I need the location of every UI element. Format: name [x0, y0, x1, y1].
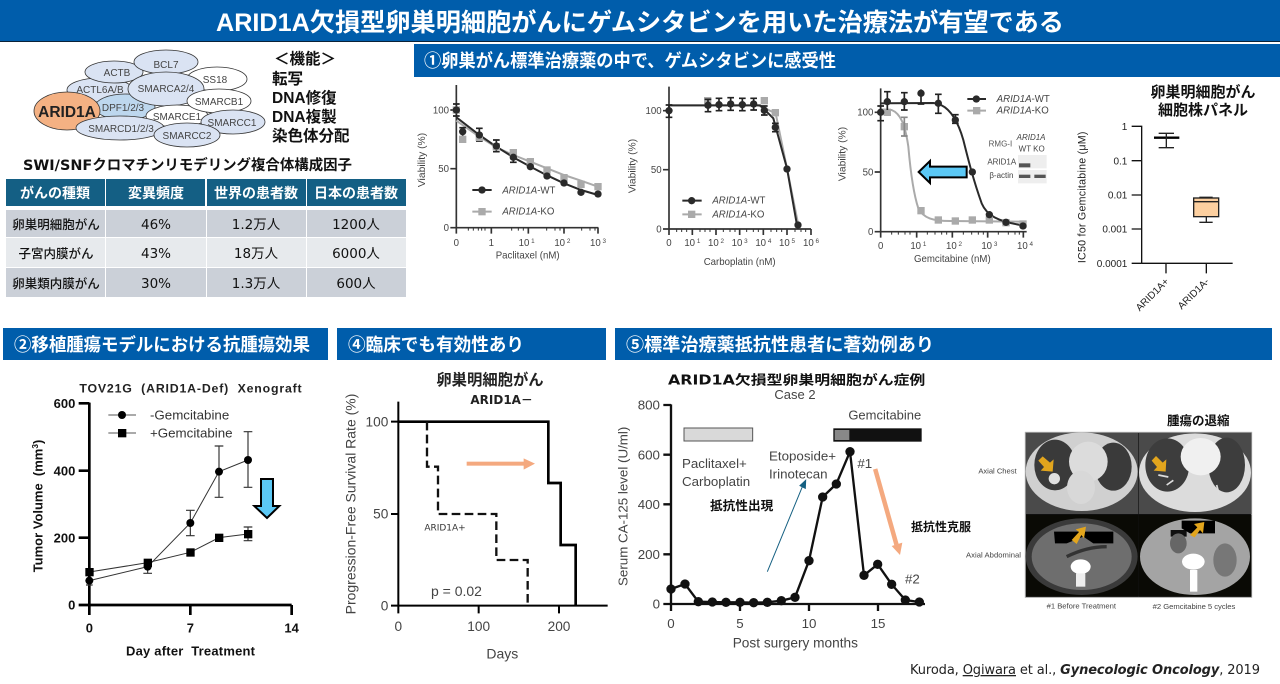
diagram: SWI/SNF complex: BCL7	[153, 60, 179, 71]
chart: paclitaxel viability: 0	[444, 223, 449, 234]
chart: CA-125 case: Serum CA-125 level (U/ml)	[615, 427, 630, 586]
chart: progression-free survival: 0	[381, 598, 389, 613]
chart: gemcitabine viability: 3	[992, 241, 998, 248]
chart: xenograft tumor volume: 600	[54, 396, 75, 411]
chart: carboplatin viability: 100	[646, 106, 662, 117]
heading: cell line panel	[1150, 83, 1256, 119]
table: mutation frequency: 46%	[141, 217, 171, 233]
chart: xenograft tumor volume: Tumor Volume (mm	[30, 449, 45, 572]
table: mutation frequency	[6, 179, 406, 297]
diagram: SWI/SNF complex: ARID1A	[38, 104, 96, 121]
chart: xenograft tumor volume: 0	[68, 598, 75, 613]
section header 5	[615, 328, 1272, 360]
chart: CA-125 case: Case 2	[774, 387, 816, 402]
arrow: left shift	[919, 161, 967, 183]
table: mutation frequency: 1.2万人	[232, 217, 281, 233]
chart: CA-125 case: 5	[736, 616, 744, 631]
chart: paclitaxel viability: Paclitaxel (nM)	[496, 251, 560, 262]
chart: paclitaxel viability: 10	[519, 238, 529, 249]
functions list: DNA複製	[272, 108, 337, 126]
western blot inset: ARID1A	[987, 158, 1017, 167]
diagram: SWI/SNF complex: SMARCB1	[195, 97, 244, 108]
chart: xenograft tumor volume: 14	[284, 620, 300, 635]
chart: progression-free survival: Days	[486, 646, 518, 662]
section header 4: ④臨床でも有効性あり	[348, 335, 524, 355]
table: mutation frequency: がんの種類	[20, 185, 90, 201]
chart: carboplatin viability: ARID1A-WT	[711, 196, 766, 207]
chart: IC50 box plot: ARID1A+	[1134, 276, 1172, 314]
chart: CA-125 case: 800	[638, 398, 660, 413]
chart: gemcitabine viability: 2	[957, 241, 962, 248]
chart: xenograft tumor volume: 400	[54, 463, 75, 478]
chart: CA-125 case: Etoposide+	[769, 448, 836, 463]
table: mutation frequency: 6000人	[332, 246, 380, 262]
chart: paclitaxel viability: ARID1A-WT	[501, 185, 556, 196]
label: resistance overcome: 抵抗性克服	[911, 519, 971, 534]
chart: carboplatin viability: Carboplatin (nM)	[704, 257, 776, 268]
chart: CA-125 case	[615, 371, 925, 650]
chart: carboplatin viability: 6	[814, 238, 819, 245]
chart: CA-125 case: 抵抗性出現	[710, 498, 774, 513]
label: tumor shrinkage: 腫瘍の退縮	[1167, 413, 1230, 428]
table: mutation frequency: 600人	[336, 276, 376, 292]
chart: gemcitabine viability: 0	[868, 227, 873, 238]
western blot inset: RMG-I	[989, 140, 1012, 149]
chart: progression-free survival: Progression-Free Survival Rate (%)	[343, 394, 359, 614]
chart: xenograft tumor volume: +Gemcitabine	[150, 426, 233, 441]
chart: xenograft tumor volume: 3	[30, 444, 40, 449]
chart: xenograft tumor volume: )	[30, 440, 45, 444]
heading: SWI/SNF: SWI/SNFクロマチンリモデリング複合体構成因子	[23, 156, 352, 174]
chart: carboplatin viability: 10	[708, 238, 719, 249]
western blot inset	[987, 133, 1047, 183]
chart: progression-free survival: p = 0.02	[431, 583, 482, 599]
table: mutation frequency: 子宮内膜がん	[18, 246, 94, 261]
section header 1	[414, 44, 1280, 77]
chart: gemcitabine viability: 4	[1028, 241, 1033, 248]
CT images panel: Axial Abdominal	[966, 551, 1021, 560]
chart: progression-free survival: 200	[548, 619, 571, 634]
table: mutation frequency: 変異頻度	[128, 185, 184, 201]
western blot inset: β-actin	[989, 171, 1013, 180]
chart: paclitaxel viability: 3	[601, 238, 606, 245]
chart: gemcitabine viability: Viability (%)	[838, 127, 849, 181]
chart: CA-125 case: 400	[638, 497, 660, 512]
table: mutation frequency: 18万人	[234, 246, 279, 262]
diagram: SWI/SNF complex: ACTL6A/B	[76, 85, 124, 96]
CT: chest after	[1139, 433, 1251, 514]
chart: carboplatin viability: Viability (%)	[628, 139, 639, 193]
chart: carboplatin viability: 10	[779, 238, 790, 249]
table: mutation frequency: 日本の患者数	[314, 185, 398, 201]
chart: IC50 box plot: IC50 for Gemcitabine (μM)	[1076, 131, 1088, 263]
table: mutation frequency: 卵巣類内膜がん	[12, 276, 100, 291]
diagram: SWI/SNF complex: SMARCD1/2/3	[88, 124, 154, 135]
chart: carboplatin viability: ARID1A-KO	[711, 210, 765, 221]
chart: progression-free survival: ARID1A+	[424, 523, 466, 533]
chart: paclitaxel viability: 0	[454, 238, 459, 249]
functions list: 転写	[272, 70, 303, 88]
chart: IC50 box plot: 0.1	[1113, 156, 1128, 167]
chart: CA-125 case: 200	[638, 547, 660, 562]
arrow: survival extension	[467, 458, 535, 470]
chart: carboplatin viability: 2	[719, 238, 724, 245]
chart: CA-125 case: #2	[905, 572, 920, 587]
chart: gemcitabine viability: 10	[946, 241, 957, 252]
chart: CA-125 case: Carboplatin	[682, 474, 750, 489]
chart: progression-free survival: 0	[395, 619, 403, 634]
CT images panel: Axial Chest	[978, 466, 1018, 475]
chart: IC50 box plot: 0.01	[1108, 191, 1128, 202]
table: mutation frequency: 43%	[141, 246, 171, 262]
functions list: ＜機能＞	[274, 49, 336, 68]
chart: carboplatin viability: 1	[695, 238, 701, 245]
chart: CA-125 case: Gemcitabine	[848, 407, 921, 422]
chart: carboplatin viability	[628, 87, 819, 268]
chart: progression-free survival: 100	[467, 619, 490, 634]
chart: paclitaxel viability: 10	[554, 238, 565, 249]
chart: CA-125 case: #1	[857, 456, 872, 471]
chart: IC50 box plot: 0.0001	[1097, 259, 1128, 270]
chart: xenograft tumor volume: Day after Treatment	[126, 644, 256, 659]
chart: paclitaxel viability: 50	[438, 164, 449, 175]
chart: IC50 box plot	[1076, 122, 1233, 314]
chart: gemcitabine viability: ARID1A-KO	[996, 105, 1049, 116]
chart: gemcitabine viability: 0	[878, 241, 883, 252]
functions list: 染色体分配	[272, 126, 350, 145]
chart: xenograft tumor volume	[30, 381, 302, 659]
chart: carboplatin viability: 10	[732, 238, 742, 249]
chart: gemcitabine viability: 1	[921, 241, 927, 248]
chart: progression-free survival: 50	[373, 507, 389, 522]
chart: progression-free survival: ARID1A－	[470, 393, 533, 407]
chart: carboplatin viability: 50	[651, 165, 662, 176]
chart: CA-125 case: Paclitaxel+	[682, 456, 747, 471]
chart: xenograft tumor volume: 0	[86, 620, 93, 635]
western blot inset: ARID1A	[1016, 133, 1046, 142]
diagram: SWI/SNF complex: SMARCE1	[153, 112, 202, 123]
chart: xenograft tumor volume: -Gemcitabine	[150, 408, 229, 423]
functions list	[272, 49, 350, 145]
table: mutation frequency: 卵巣明細胞がん	[12, 217, 100, 232]
chart: paclitaxel viability: 1	[529, 238, 535, 245]
chart: progression-free survival	[343, 371, 608, 662]
chart: carboplatin viability: 0	[656, 224, 662, 235]
title: ARID1A欠損型卵巣明細胞がんにゲムシタビンを用いた治療法が有望である	[216, 8, 1064, 37]
chart: gemcitabine viability: 10	[910, 241, 921, 252]
CT: abdomen after	[1139, 515, 1251, 597]
section header 2	[3, 328, 328, 360]
diagram: SWI/SNF complex: DPF1/2/3	[102, 103, 145, 114]
chart: paclitaxel viability: 100	[433, 105, 449, 116]
chart: carboplatin viability: 4	[766, 238, 772, 245]
chart: carboplatin viability: 10	[684, 238, 695, 249]
chart: gemcitabine viability: 10	[981, 241, 992, 252]
title	[0, 0, 1280, 42]
chart: paclitaxel viability: 10	[590, 238, 601, 249]
chart: paclitaxel viability: 1	[489, 238, 494, 249]
western blot inset: WT KO	[1019, 144, 1045, 153]
diagram: SWI/SNF complex	[34, 50, 265, 147]
section header 4	[337, 328, 606, 360]
section header 1: ①卵巣がん標準治療薬の中で、ゲムシタビンに感受性	[424, 50, 836, 71]
CT: chest before	[1026, 432, 1138, 514]
CT: abdomen before	[1026, 515, 1138, 597]
arrow: tumor reduction	[254, 479, 279, 518]
diagram: SWI/SNF complex: SMARCC1	[208, 118, 257, 129]
chart: CA-125 case: 10	[802, 616, 816, 631]
chart: carboplatin viability: 10	[755, 238, 766, 249]
chart: carboplatin viability: 3	[742, 238, 748, 245]
chart: progression-free survival: 100	[366, 414, 389, 429]
chart: gemcitabine viability: Gemcitabine (nM)	[914, 254, 991, 265]
chart: carboplatin viability: 0	[666, 238, 672, 249]
CT images panel: #1 Before Treatment	[1047, 601, 1117, 610]
diagram: SWI/SNF complex: SS18	[203, 75, 228, 86]
chart: gemcitabine viability: 50	[863, 167, 873, 178]
chart: paclitaxel viability	[417, 85, 606, 262]
chart: IC50 box plot: 1	[1122, 122, 1128, 133]
table: mutation frequency: 1.3万人	[232, 276, 281, 292]
diagram: SWI/SNF complex: ACTB	[104, 68, 131, 79]
chart: paclitaxel viability: Viability (%)	[417, 133, 428, 187]
chart: xenograft tumor volume: TOV21G (ARID1A-Def) Xenograft	[79, 381, 302, 395]
citation: Kuroda, Ogiwara et al., Gynecologic Oncology, 2019	[910, 663, 1260, 678]
arrow: resistance overcome	[873, 468, 902, 555]
heading: cell line panel: 細胞株パネル	[1158, 101, 1248, 119]
table: mutation frequency: 30%	[141, 276, 171, 292]
chart: gemcitabine viability: ARID1A-WT	[996, 94, 1050, 105]
table: mutation frequency: 世界の患者数	[214, 185, 298, 201]
chart: CA-125 case: Post surgery months	[733, 635, 858, 650]
chart: paclitaxel viability: ARID1A-KO	[501, 207, 555, 218]
arrow: resistance emergence	[767, 480, 806, 572]
chart: CA-125 case: 0	[667, 616, 675, 631]
chart: CA-125 case: 600	[638, 447, 660, 462]
chart: progression-free survival: 卵巣明細胞がん	[436, 371, 544, 389]
chart: IC50 box plot: ARID1A-	[1176, 276, 1212, 312]
chart: CA-125 case: 0	[653, 597, 660, 612]
chart: carboplatin viability: 10	[803, 238, 814, 249]
heading: cell line panel: 卵巣明細胞がん	[1150, 83, 1256, 101]
chart: paclitaxel viability: 2	[565, 238, 571, 245]
chart: xenograft tumor volume: 200	[54, 530, 75, 545]
functions list: DNA修復	[272, 88, 337, 107]
diagram: SWI/SNF complex: SMARCC2	[163, 131, 212, 142]
chart: gemcitabine viability	[838, 88, 1050, 265]
section header 5: ⑤標準治療薬抵抗性患者に著効例あり	[626, 334, 934, 355]
table: mutation frequency: 1200人	[332, 217, 380, 233]
section header 2: ②移植腫瘍モデルにおける抗腫瘍効果	[14, 334, 310, 355]
chart: CA-125 case: Irinotecan	[769, 466, 828, 481]
chart: CA-125 case: 15	[871, 616, 885, 631]
diagram: SWI/SNF complex: SMARCA2/4	[138, 84, 195, 95]
chart: carboplatin viability: 5	[790, 238, 795, 245]
chart: CA-125 case: ARID1A欠損型卵巣明細胞がん症例	[668, 371, 925, 388]
chart: IC50 box plot: 0.001	[1102, 225, 1128, 236]
chart: xenograft tumor volume: 7	[187, 620, 194, 635]
CT images panel: #2 Gemcitabine 5 cycles	[1153, 602, 1236, 611]
chart: gemcitabine viability: 100	[857, 108, 873, 119]
CT images panel	[966, 432, 1252, 611]
chart: gemcitabine viability: 10	[1017, 241, 1028, 252]
